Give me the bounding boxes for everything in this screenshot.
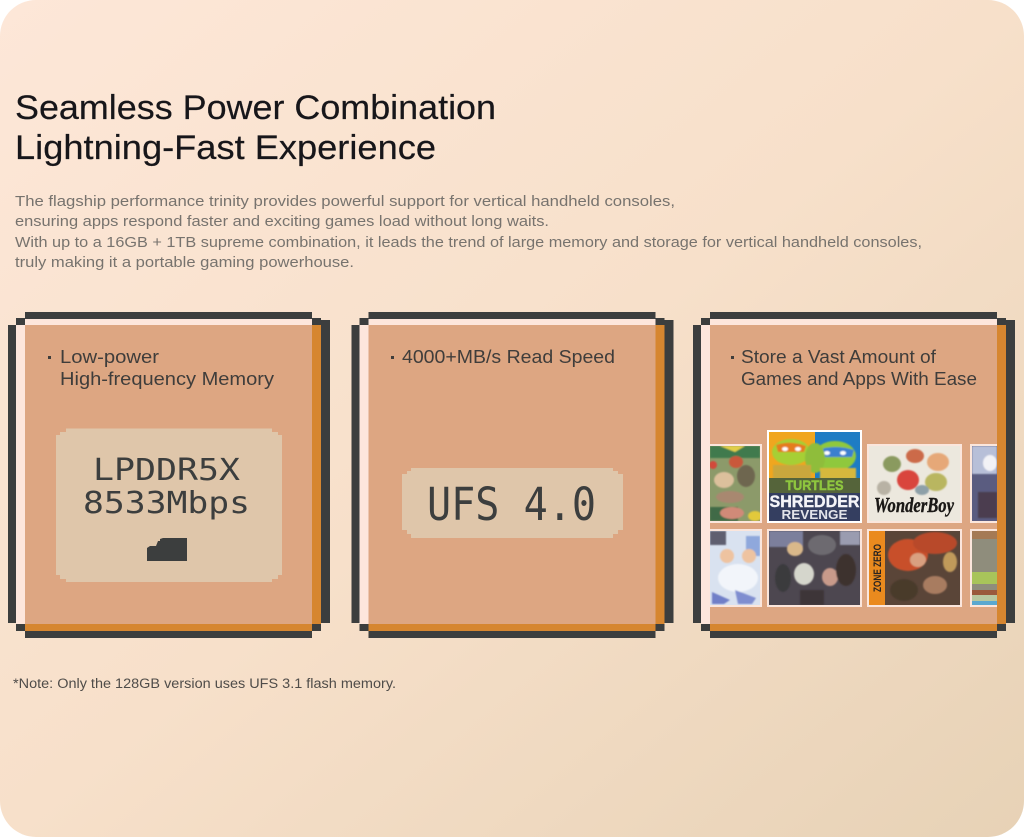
UFS text: UFS 4.0 [427,478,596,531]
panel: memory [8,312,330,638]
game cover: ice princess [710,529,762,607]
speed feature heading: 4000+MB/s Read Speed [402,347,615,367]
intro paragraph: With up to a 16GB + 1TB supreme combination, it leads the trend of large memory and storage for vertical handheld consoles, [15,234,922,251]
icon: memory card [147,538,187,561]
game cover: Turtles Shredder's Revenge: TURTLES [786,477,844,493]
game cover: adventure art [709,444,762,523]
intro paragraph: ensuring apps respond faster and exciting games load without long waits. [15,213,549,230]
intro paragraph: The flagship performance trinity provides powerful support for vertical handheld consoles, [15,193,675,210]
footnote: *Note: Only the 128GB version uses UFS 3.1 flash memory. [13,676,396,691]
memory spec text: 8533Mbps [83,486,250,521]
UFS plate [402,468,623,538]
game cover: Turtles Shredder's Revenge [767,430,862,523]
library feature heading [731,347,977,389]
memory spec text: LPDDR5X [93,453,240,488]
library feature heading: Games and Apps With Ease [741,369,977,389]
memory feature heading: High-frequency Memory [60,369,274,389]
game cover: Turtles Shredder's Revenge: REVENGE [782,507,848,522]
game cover: dark fantasy [767,529,862,607]
intro paragraph [15,193,922,271]
game cover: Zone Zero: ZONE ZERO [872,544,884,592]
intro paragraph: truly making it a portable gaming powerhouse. [15,254,354,271]
memory spec text [83,453,250,521]
title: Seamless Power Combination [15,89,496,127]
game cover: hollow knight [970,444,997,523]
library feature heading: Store a Vast Amount of [741,347,937,367]
title [15,89,496,167]
game cover: Wonder Boy: WonderBoy [874,493,955,517]
memory feature heading: Low-power [60,347,159,367]
title: Lightning-Fast Experience [15,129,436,167]
memory feature heading [48,347,274,389]
game cover: Wonder Boy [867,444,962,523]
game cover: Turtles Shredder's Revenge: SHREDDER [770,492,860,511]
game cover: Zone Zero [867,529,962,607]
game cover: pixel platformer [970,529,997,607]
panel: storage speed [352,312,674,638]
memory spec plate [56,428,282,582]
panel: game library [693,312,1015,638]
